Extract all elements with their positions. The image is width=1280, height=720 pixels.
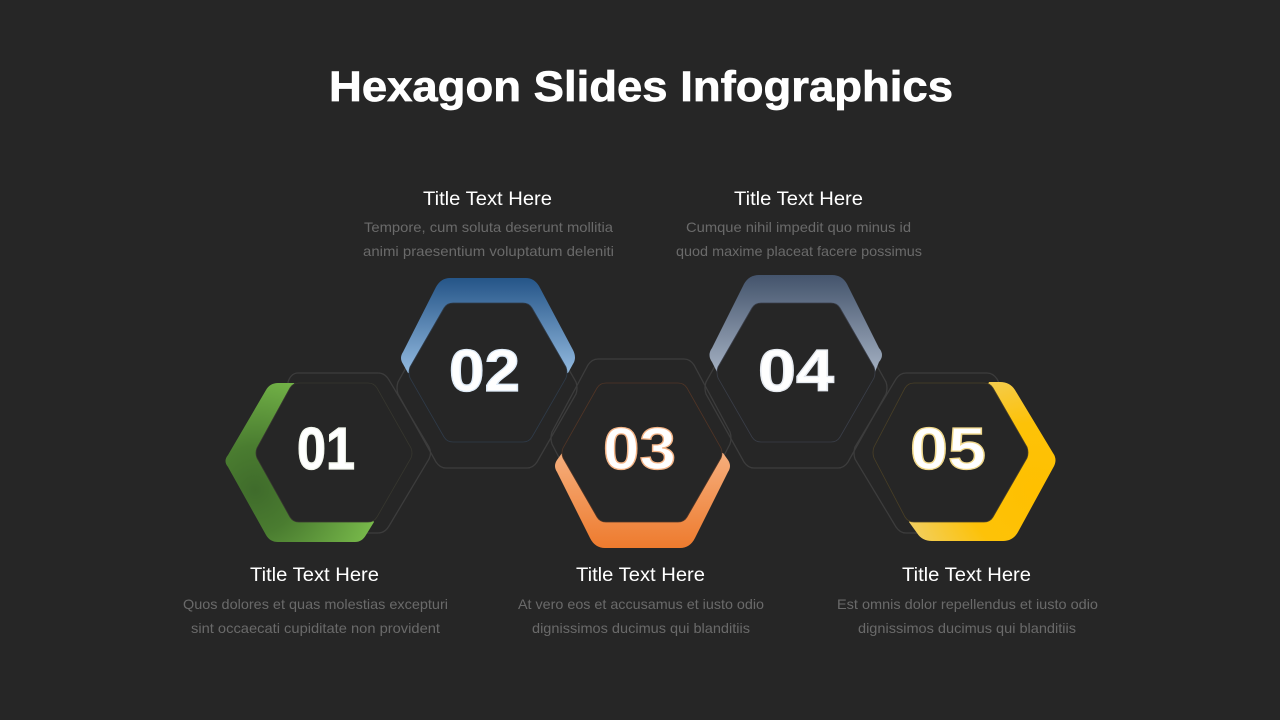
number 04: 04	[758, 338, 834, 404]
number 03: 03	[603, 416, 676, 482]
hexagon 03 outline	[551, 359, 731, 519]
body: item 02: animi praesentium voluptatum deleniti	[363, 243, 614, 259]
hexagon 04	[710, 275, 882, 442]
hexagon 02 inner face	[409, 303, 567, 442]
number 05: 05	[910, 416, 986, 482]
hexagon 01 inner face	[256, 383, 412, 522]
hexagon 02 coloured band	[401, 278, 575, 385]
body: item 01	[183, 596, 448, 636]
text block: item 03	[518, 565, 764, 636]
heading: item 02: Title Text Here	[423, 189, 552, 210]
hexagon 01	[226, 383, 412, 542]
hexagon 05 coloured band	[909, 382, 1056, 541]
body: item 03: dignissimos ducimus qui blanditiis	[532, 620, 750, 636]
text block: item 05	[837, 565, 1098, 636]
hexagon 03	[555, 383, 730, 548]
number 01: 01	[297, 416, 355, 482]
text block: item 01	[183, 565, 448, 636]
hexagon 05	[873, 382, 1056, 541]
text block: item 02	[363, 189, 614, 259]
body: item 02	[363, 219, 614, 259]
heading: item 04: Title Text Here	[734, 189, 863, 210]
hexagon 04 outline	[705, 308, 887, 468]
hexagon 03 inner face	[562, 383, 722, 522]
body: item 03	[518, 596, 764, 636]
hexagon 02	[401, 278, 575, 442]
number 02: 02	[449, 338, 520, 404]
hexagon 04 coloured band	[710, 275, 882, 385]
heading: item 01: Title Text Here	[250, 565, 379, 586]
body: item 04: quod maxime placeat facere possimus	[676, 243, 922, 259]
body: item 05: Est omnis dolor repellendus et iusto odio	[837, 596, 1098, 612]
hexagon 03 coloured band	[555, 440, 730, 548]
hexagon 05 outline	[854, 373, 1030, 533]
body: item 02: Tempore, cum soluta deserunt mollitia	[364, 219, 613, 235]
body: item 04: Cumque nihil impedit quo minus id	[686, 219, 911, 235]
hexagon 02 outline	[397, 308, 577, 468]
title: Hexagon Slides Infographics	[329, 63, 953, 111]
body: item 03: At vero eos et accusamus et iusto odio	[518, 596, 764, 612]
heading: item 03: Title Text Here	[576, 565, 705, 586]
body: item 05: dignissimos ducimus qui blanditiis	[858, 620, 1076, 636]
body: item 04	[676, 219, 922, 259]
hexagon 01 coloured band	[226, 383, 374, 542]
body: item 01: sint occaecati cupiditate non provident	[191, 620, 440, 636]
hexagon 04 inner face	[717, 303, 875, 442]
heading: item 05: Title Text Here	[902, 565, 1031, 586]
text block: item 04	[676, 189, 922, 259]
body: item 01: Quos dolores et quas molestias excepturi	[183, 596, 448, 612]
hexagon 01 outline	[288, 373, 430, 533]
body: item 05	[837, 596, 1098, 636]
hexagon 05 inner face	[873, 383, 1028, 522]
